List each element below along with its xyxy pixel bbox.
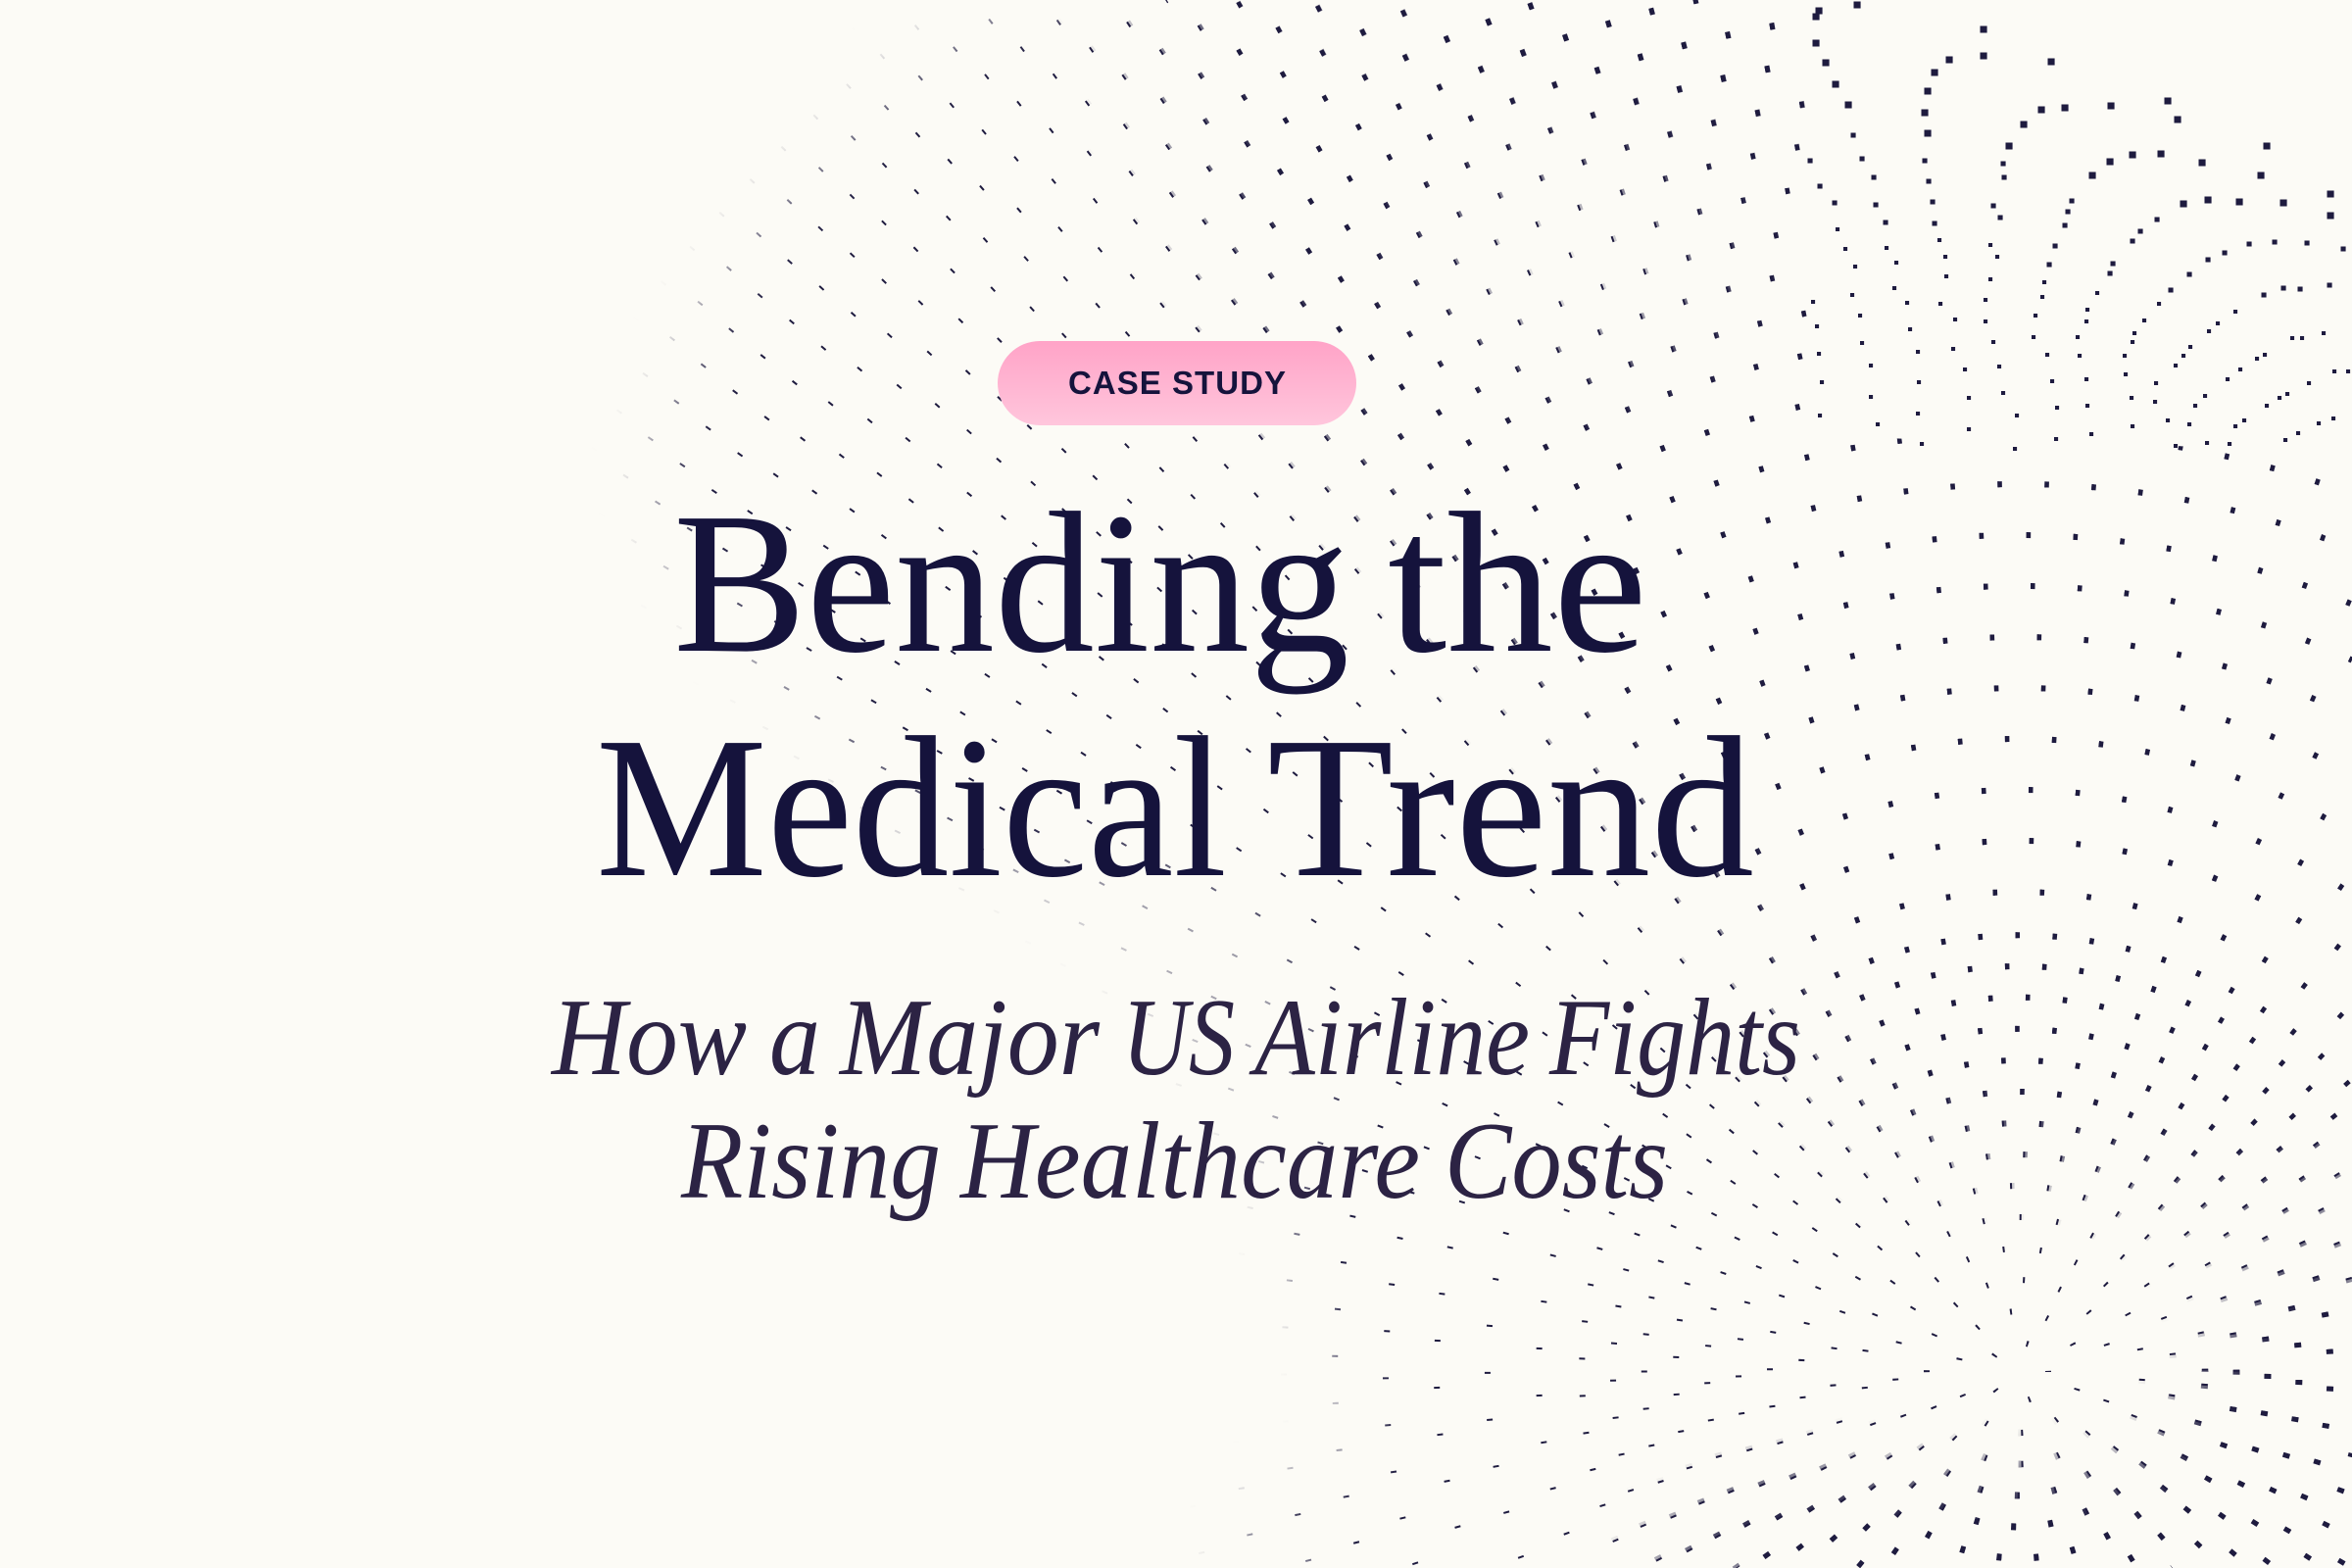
subtitle: How [550,977,747,1099]
title: Bending [673,470,1349,695]
halftone dot field [619,0,2352,1568]
subtitle: Airline [1249,977,1530,1099]
subtitle: Healthcare [958,1101,1420,1222]
badge: case study [998,341,1356,425]
badge: case study: CASE STUDY [1068,365,1286,401]
subtitle [550,977,1800,1222]
subtitle: Costs [1445,1101,1668,1222]
title: Trend [1267,695,1754,919]
subtitle: Major [838,977,1100,1099]
title: Medical [596,695,1227,919]
subtitle: Rising [680,1101,941,1222]
title: the [1388,470,1647,695]
subtitle: US [1122,977,1235,1099]
subtitle: Fights [1548,977,1800,1099]
title [596,470,1754,919]
subtitle: a [769,977,820,1099]
